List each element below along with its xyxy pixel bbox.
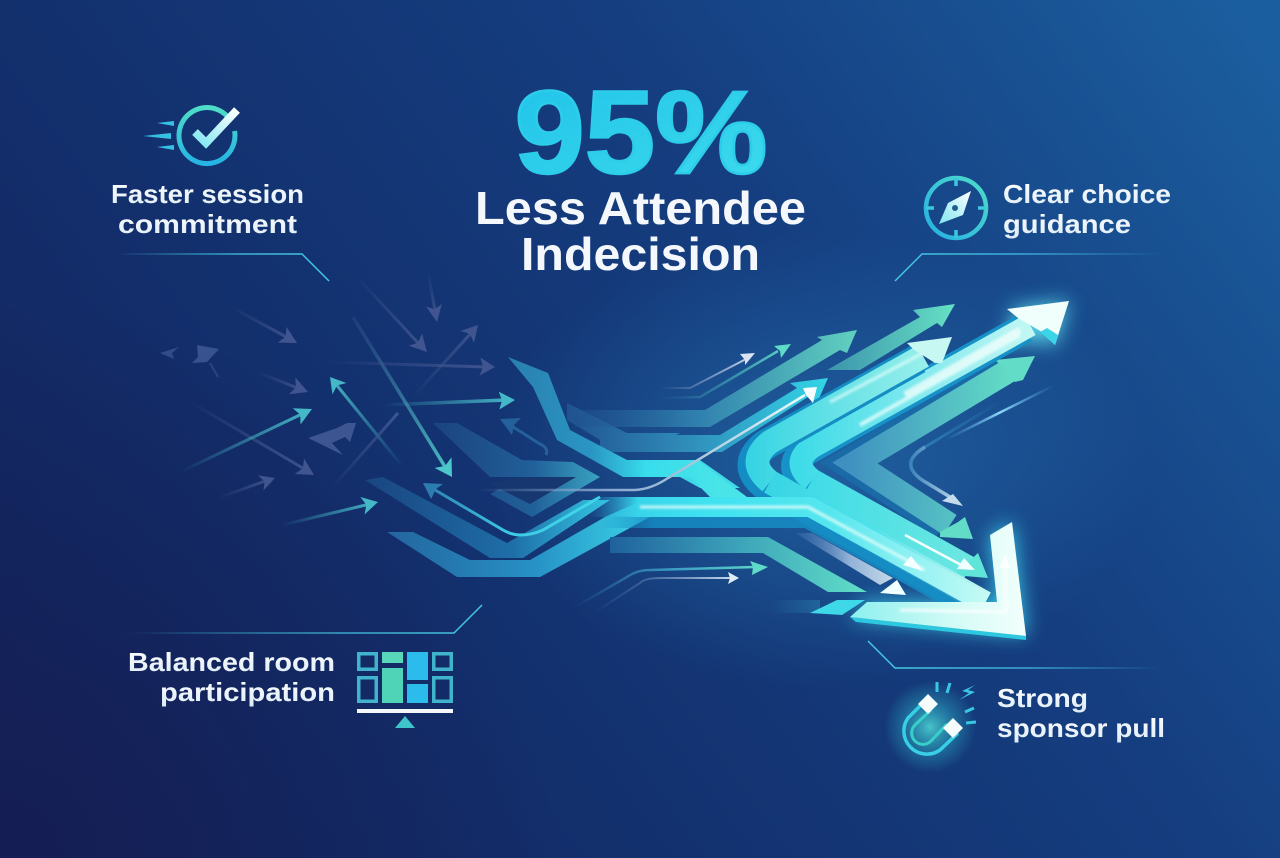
label (997, 683, 1165, 743)
lower teal band (610, 537, 867, 592)
leader line (128, 605, 482, 633)
outer chevron to light arrow (752, 337, 985, 606)
teal arrow 1 (575, 330, 857, 427)
label: Balanced room (128, 647, 335, 677)
lower white thin arrow (595, 572, 739, 612)
callout: clear choice guidance (895, 178, 1171, 281)
lower teal thin arrow (575, 561, 768, 607)
lavender down arrow (795, 533, 906, 595)
leader line (868, 641, 1158, 668)
callout: balanced room participation (128, 605, 482, 728)
glow behind the two lead arrowheads (850, 301, 1069, 635)
thin arrow white (660, 353, 755, 388)
converging chevron arrows (752, 325, 1035, 606)
label: Faster session (111, 179, 304, 209)
third chevron with teal heads (849, 356, 1035, 539)
label (1003, 179, 1171, 239)
icon: check in circle with speed lines (143, 108, 237, 164)
curved thin cyan arrow (423, 483, 600, 535)
leader line (115, 254, 329, 281)
hook band from upper left (508, 357, 747, 497)
inner chevron to white arrow (796, 325, 1030, 578)
callout: strong sponsor pull (868, 641, 1165, 773)
main trunk into lead arrow (590, 507, 985, 609)
label (128, 647, 335, 707)
label: commitment (118, 209, 297, 239)
cyan arrow with white core (600, 378, 828, 488)
label: guidance (1003, 209, 1131, 239)
left converging bands (365, 403, 680, 577)
big number: 95% (514, 67, 768, 199)
icon: compass (926, 178, 986, 238)
lavender thin line to upper arrow (477, 387, 817, 490)
thin chevron arrow (911, 400, 1003, 506)
label: Strong (997, 683, 1088, 713)
subtitle line 1: Less Attendee (475, 182, 806, 234)
label (111, 179, 304, 239)
upper-left teal arrows (575, 304, 955, 427)
label: participation (160, 677, 335, 707)
teal arrow 2 (827, 304, 955, 370)
thin arrow teal (660, 344, 791, 398)
lead arrow up: white (905, 301, 1069, 395)
streak of light (945, 386, 1053, 440)
small cyan parallelogram arrow (770, 600, 865, 615)
label: Clear choice (1003, 179, 1171, 209)
lower bands (575, 533, 906, 615)
icon: magnet (884, 681, 976, 773)
label: sponsor pull (997, 713, 1165, 743)
scattered indecisive arrows (160, 273, 547, 525)
subtitle line 2: Indecision (521, 228, 760, 280)
callout: faster session commitment (111, 108, 329, 281)
title: 95% Less Attendee Indecision (475, 67, 806, 280)
lead arrow down: L-shaped head (850, 522, 1026, 640)
leader line (895, 254, 1162, 281)
icon: seating grid (357, 652, 453, 728)
